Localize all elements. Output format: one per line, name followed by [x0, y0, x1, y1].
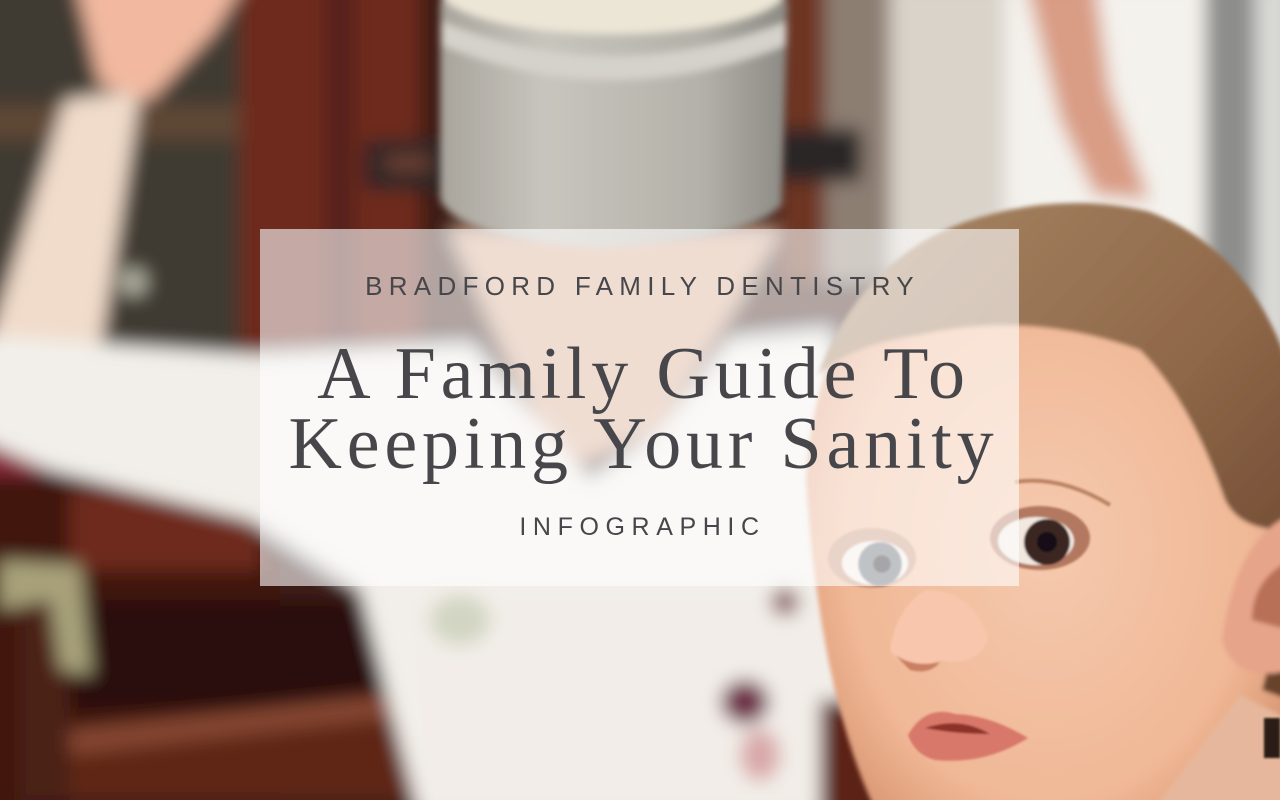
organisation name: BRADFORD FAMILY DENTISTRY	[365, 271, 920, 301]
dark corner	[1264, 718, 1280, 758]
translucent title panel	[260, 229, 1019, 586]
pot	[439, 0, 788, 248]
ear	[1222, 515, 1280, 674]
white shirt	[0, 330, 860, 800]
hair	[818, 203, 1280, 700]
baby head	[806, 203, 1280, 800]
mouth	[908, 712, 1028, 761]
arms and raised hands	[0, 90, 140, 350]
title: A Family Guide To	[317, 333, 970, 415]
nose	[890, 590, 988, 666]
title	[289, 333, 998, 485]
pot handles	[365, 140, 450, 190]
subtitle: INFOGRAPHIC	[519, 513, 766, 541]
title: Keeping Your Sanity	[289, 403, 998, 485]
brows	[1015, 481, 1110, 505]
eyes	[828, 528, 916, 588]
neck	[450, 230, 780, 470]
